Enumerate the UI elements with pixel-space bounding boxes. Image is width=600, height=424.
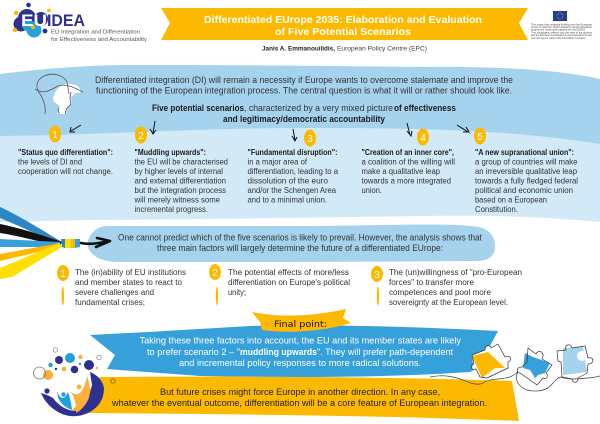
scenario 3 text: and to a minimal union.	[248, 196, 327, 204]
scenario 5 text: towards a fully fledged federal	[475, 176, 578, 186]
icon: number badges 1 to 5 with arrows: 2	[138, 131, 144, 142]
scenario 5 text: Constitution.	[475, 205, 518, 214]
factor 3: competences and pool more	[389, 288, 492, 297]
EU funding notice: and the European Commission is not responsible for any	[531, 33, 593, 37]
intro text	[95, 75, 513, 96]
panel: orange closing statement: whatever the eventual outcome, differentiation will be a core feature of European integration.	[111, 398, 487, 408]
panel: final point conclusion: Taking these three factors into account, the EU and its member states are likely	[140, 336, 462, 346]
factor 3	[371, 266, 522, 307]
scenario 1 text	[18, 148, 113, 176]
callout: three main factors	[87, 224, 495, 262]
logo: EUIDEA: EU Integration and Differentiation	[51, 30, 140, 36]
scenario 2 text: will merely witness some	[134, 196, 220, 204]
logo: EUIDEA: EU	[21, 11, 47, 30]
panel: intro wave background	[0, 65, 600, 150]
scenario 2 text: but the integration process	[134, 186, 226, 195]
EU funding notice: Union's Horizon 2020 research and innovation	[531, 25, 593, 29]
scenario 5 text: "A new supranational union":	[475, 148, 574, 157]
scenario 4 text: make a qualitative leap	[362, 167, 441, 176]
heading: five potential scenarios	[152, 103, 456, 124]
factor 1: The (in)ability of EU institutions	[75, 268, 186, 277]
scenario 3 text: in a major area of	[248, 158, 308, 166]
panel: orange closing statement	[70, 377, 519, 421]
panel: final point conclusion: and incremental policy responses to more radical solutions.	[179, 358, 421, 368]
author line: European Policy Centre (EPC)	[337, 46, 427, 52]
intro text: functioning of the European integration process. The central question is what it will or rather should look like.	[96, 86, 512, 96]
scenario 4 text: towards a more integrated	[362, 176, 451, 186]
EU funding notice: This infographic reflects only the view of the authors	[531, 30, 593, 34]
factor 1: 1	[60, 269, 66, 280]
panel: orange closing statement: But future crises might force Europe in another direction. In any case,	[160, 387, 440, 397]
factor 2	[209, 264, 350, 306]
EU funding notice: This project has received funding from the European	[531, 22, 592, 26]
heading: five potential scenarios: , characterized by a very mixed picture	[244, 103, 393, 113]
title banner: of Five Potential Scenarios	[275, 26, 411, 38]
callout: three main factors: One cannot predict which of the five scenarios is likely to prevail. However, the analysis shows that	[118, 232, 483, 242]
icon: converging ribbons with knot and arrow	[0, 207, 110, 279]
scenario 3 text: and/or the Schengen Area	[248, 186, 337, 195]
factor 3: The (un)willingness of "pro-European	[389, 268, 522, 277]
title banner	[161, 8, 528, 40]
logo: EUIDEA	[13, 3, 147, 43]
scenario 1 text: "Status quo differentiation":	[18, 148, 113, 157]
scenario 5 text: an irreversible qualitative leap	[475, 167, 578, 176]
panel: scenarios background	[0, 128, 600, 222]
panel: final point conclusion: ". They will prefer path-dependent	[317, 347, 454, 357]
scenario 3 text	[248, 148, 339, 204]
factor 2: The potential effects of more/less	[228, 268, 349, 277]
logo: EUIDEA: IDEA	[47, 11, 85, 30]
factor 3: 3	[374, 270, 380, 281]
scenario 2 text: incremental progress.	[134, 205, 208, 214]
logo: EUIDEA: for Effectiveness and Accountability	[51, 37, 147, 43]
title banner: Differentiated EUrope 2035: Elaboration and Evaluation	[204, 14, 482, 26]
icon: number badges 1 to 5 with arrows: 5	[477, 132, 483, 143]
scenario 4 text	[362, 148, 455, 195]
heading: five potential scenarios: and legitimacy/democratic accountability	[223, 114, 385, 124]
heading: five potential scenarios: Five potential scenarios	[152, 103, 244, 113]
scenario 5 text: a group of countries will make	[475, 158, 578, 166]
EU funding notice: use that may be made of the information it contains.	[531, 36, 586, 40]
factor 3: forces" to transfer more	[389, 278, 475, 287]
icon: number badges 1 to 5 with arrows: 3	[307, 134, 313, 145]
icon: puzzle pieces with wire	[430, 344, 600, 391]
intro text: Differentiated integration (DI) will remain a necessity if Europe wants to overcome stalemate and improve the	[95, 75, 513, 85]
EU funding notice: programme under grant agreement No 822622.	[531, 28, 586, 32]
scenario 4 text: "Creation of an inner core",	[362, 148, 454, 157]
icon: number badges 1 to 5 with arrows: 4	[420, 133, 426, 144]
heading flag: final point	[252, 309, 351, 332]
callout: three main factors: three main factors will largely determine the future of a differentiated EUrope:	[157, 243, 443, 253]
panel: final point conclusion: muddling upwards	[240, 347, 317, 357]
scenario 5 text: based on a European	[475, 196, 547, 204]
factor 2: differentiation on Europe's political	[228, 278, 350, 287]
author line	[262, 46, 427, 52]
panel: final point conclusion	[90, 325, 498, 377]
scenario 2 text: and external differentiation	[134, 176, 226, 186]
scenario 3 text: "Fundamental disruption":	[248, 148, 338, 157]
factor 2: unity;	[228, 288, 246, 297]
scenario 2 text: by higher levels of internal	[134, 167, 223, 176]
icon: number badges 1 to 5 with arrows	[49, 121, 486, 146]
icon: number badges 1 to 5 with arrows: 1	[52, 130, 58, 141]
scenario 2 text	[134, 148, 228, 214]
scenario 3 text: differentiation, leading to a	[248, 167, 339, 176]
factor 2: 2	[212, 268, 218, 279]
scenario 3 text: dissolution of the euro	[248, 176, 329, 186]
factor 1	[57, 265, 186, 307]
scenario 2 text: "Muddling upwards":	[134, 148, 206, 157]
scenario 5 text	[475, 148, 578, 214]
factor 1: fundamental crises;	[75, 298, 145, 307]
heading: five potential scenarios: of effectiveness	[394, 103, 456, 113]
icon: people and circles emblem	[34, 348, 115, 424]
factor 3: sovereignty at the European level.	[389, 298, 508, 307]
heading flag: final point: Final point:	[274, 320, 327, 330]
scenario 4 text: a coalition of the willing will	[362, 158, 455, 166]
scenario 1 text: the levels of DI and	[18, 158, 82, 166]
panel: final point conclusion: to prefer scenario 2 – "	[147, 347, 240, 357]
EU funding notice	[531, 11, 593, 40]
scenario 5 text: political and economic union	[475, 186, 573, 195]
scenario 4 text: union.	[362, 186, 382, 195]
scenario 2 text: the EU will be characterised	[134, 158, 228, 166]
icon: head outlines	[35, 74, 83, 114]
factor 1: severe challenges and	[75, 288, 154, 297]
factor 1: and member states to react to	[75, 278, 183, 287]
author line: Janis A. Emmanouilidis,	[262, 46, 335, 52]
scenario 1 text: cooperation will not change.	[18, 167, 113, 176]
